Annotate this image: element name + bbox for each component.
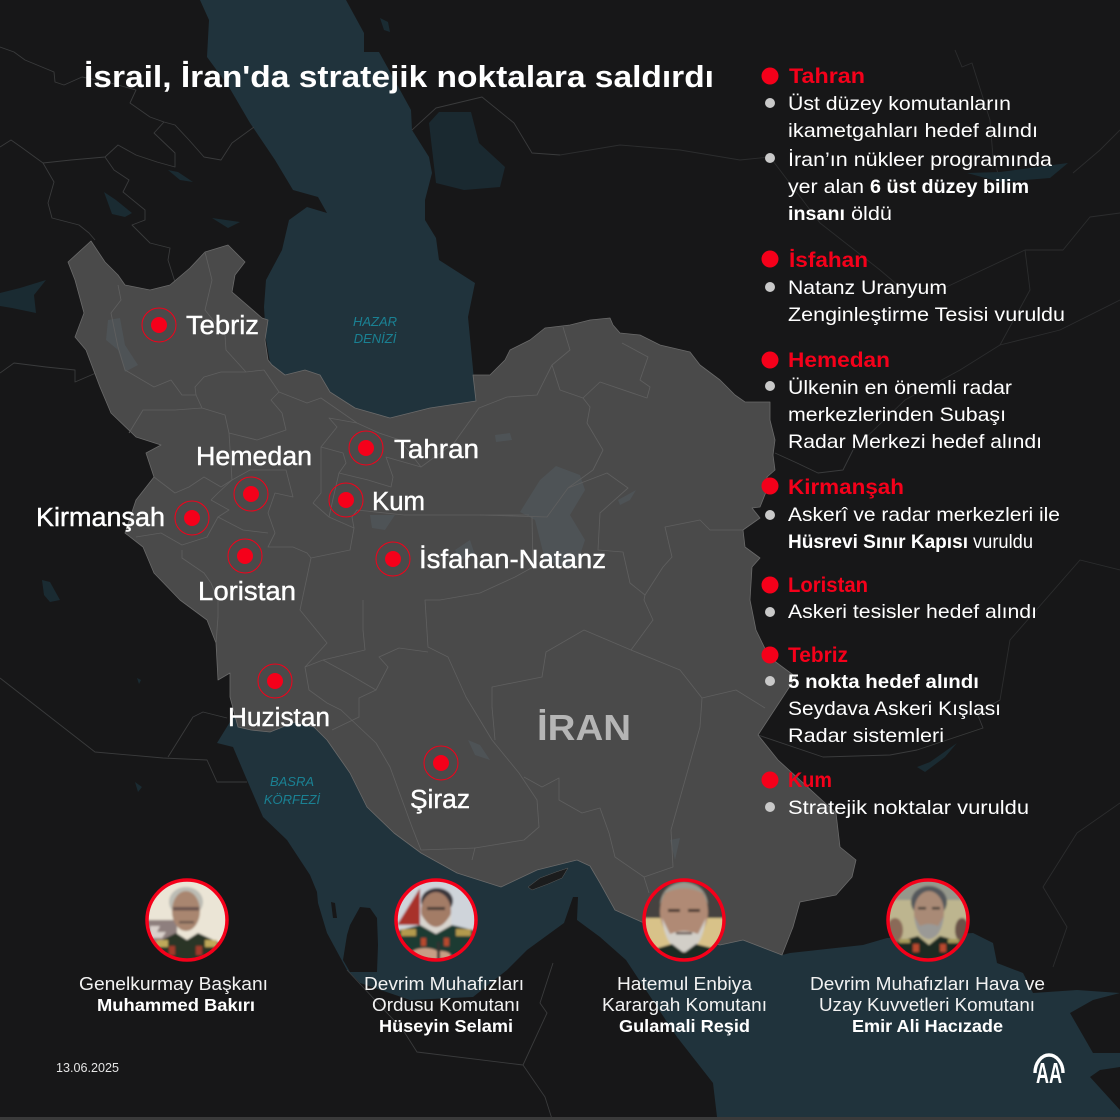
sea label: Hazar Denizi: HAZAR bbox=[353, 314, 397, 329]
panel: Tahran: insanı bbox=[788, 204, 845, 225]
marker: Şiraz: Şiraz bbox=[410, 786, 470, 814]
land: Bahrain island bbox=[331, 902, 337, 918]
caption: Muhammed Bakıri: Muhammed Bakırı bbox=[97, 995, 255, 1015]
marker: Tahran bbox=[349, 431, 479, 465]
panel: Kum: Stratejik noktalar vuruldu bbox=[788, 797, 1029, 819]
panel: Tahran: öldü bbox=[851, 203, 892, 225]
panel: Tebriz: Radar sistemleri bbox=[788, 725, 944, 747]
land: Qeshm island bbox=[528, 868, 568, 890]
portrait: Emir Ali Hacızade bbox=[886, 878, 970, 962]
panel: Tahran: yer alan bbox=[788, 176, 864, 198]
marker: Kum bbox=[329, 483, 425, 517]
panel: Kirmanşah: Askerî ve radar merkezleri ile bbox=[788, 504, 1060, 526]
sea label: Basra Körfezi: KÖRFEZİ bbox=[264, 792, 321, 807]
sea label: Basra Körfezi bbox=[264, 774, 321, 807]
marker: Şiraz bbox=[410, 746, 470, 814]
logo: Anadolu Agency bbox=[1035, 1055, 1063, 1090]
panel: Tahran: 6 üst düzey bilim bbox=[870, 177, 1029, 198]
caption: Muhammed Bakıri: Genelkurmay Başkanı bbox=[79, 974, 268, 994]
marker: Kirmanşah bbox=[36, 501, 209, 535]
caption: Emir Ali Hacızade: Devrim Muhafızları Hava ve bbox=[810, 974, 1045, 994]
caption: Gulamali Reşid: Hatemul Enbiya bbox=[617, 974, 753, 994]
caption: Emir Ali Hacızade bbox=[810, 974, 1045, 1036]
panel: Kum: Kum bbox=[788, 769, 832, 792]
marker: Hemedan: Hemedan bbox=[196, 443, 312, 471]
marker: Tebriz: Tebriz bbox=[186, 312, 259, 340]
panel: İsfahan: İsfahan bbox=[789, 249, 868, 272]
logo: Anadolu Agency: AA bbox=[1036, 1058, 1062, 1090]
portrait: Gulamali Reşid bbox=[642, 878, 726, 962]
water: Persian Gulf and Sea of Oman bbox=[217, 700, 1120, 1117]
title: İsrail, İran'da stratejik noktalara saldırdı bbox=[84, 60, 714, 94]
sea label: Hazar Denizi bbox=[353, 314, 397, 346]
panel: Tahran: Üst düzey komutanların bbox=[788, 93, 1011, 115]
panel: Tebriz: Tebriz bbox=[788, 644, 848, 667]
panel: Hemedan: Hemedan bbox=[788, 349, 890, 372]
marker: Tebriz bbox=[142, 308, 259, 342]
panel: Tebriz bbox=[762, 644, 1001, 747]
caption: Hüseyin Selami bbox=[364, 974, 524, 1036]
panel: Kum bbox=[762, 769, 1029, 819]
marker: Loristan bbox=[198, 539, 296, 606]
panel: Tahran bbox=[762, 65, 1052, 225]
marker: İsfahan-Natanz: İsfahan-Natanz bbox=[419, 545, 606, 574]
Iran province borders bbox=[111, 252, 765, 893]
sea label: Basra Körfezi: BASRA bbox=[270, 774, 314, 789]
panel: Loristan: Askeri tesisler hedef alındı bbox=[788, 601, 1037, 623]
panel: İsfahan bbox=[762, 249, 1065, 326]
panel: Kirmanşah: Kirmanşah bbox=[788, 476, 904, 499]
panel: Tebriz: Seydava Askeri Kışlası bbox=[788, 698, 1001, 720]
portrait: Muhammed Bakıri bbox=[145, 878, 229, 962]
caption: Muhammed Bakıri bbox=[79, 974, 268, 1015]
caption: Hüseyin Selami: Ordusu Komutanı bbox=[372, 995, 520, 1015]
land: Qatar peninsula bbox=[343, 907, 378, 972]
panel: Hemedan: merkezlerinden Subaşı bbox=[788, 404, 1006, 426]
marker: Hemedan bbox=[196, 443, 312, 511]
caption: Hüseyin Selami: Hüseyin Selami bbox=[379, 1016, 513, 1036]
marker: Huzistan: Huzistan bbox=[228, 704, 330, 732]
caption: Emir Ali Hacızade: Emir Ali Hacızade bbox=[852, 1016, 1003, 1036]
marker: Kirmanşah: Kirmanşah bbox=[36, 504, 165, 532]
Iran salt lakes and deserts bbox=[106, 318, 680, 860]
date: 13.06.2025 bbox=[56, 1061, 119, 1075]
caption: Gulamali Reşid: Gulamali Reşid bbox=[619, 1016, 750, 1036]
panel: İsfahan: Natanz Uranyum bbox=[788, 277, 947, 299]
water: Caspian Sea bbox=[200, 0, 476, 430]
caption: Emir Ali Hacızade: Uzay Kuvvetleri Komutanı bbox=[819, 995, 1035, 1015]
caption: Gulamali Reşid bbox=[602, 974, 767, 1036]
water: Kara-Bogaz lagoon bbox=[429, 112, 505, 190]
panel: Tahran: Tahran bbox=[789, 65, 865, 88]
panel: Loristan bbox=[762, 574, 1037, 623]
panel: Tebriz: 5 nokta hedef alındı bbox=[788, 672, 979, 693]
panel: Hemedan: Ülkenin en önemli radar bbox=[788, 377, 1013, 399]
panel: Kirmanşah: Hüsrevi Sınır Kapısı bbox=[788, 532, 968, 553]
panel: Kirmanşah: vuruldu bbox=[973, 531, 1033, 553]
bottom edge bbox=[0, 1117, 1120, 1120]
panel: Hemedan bbox=[762, 349, 1042, 453]
map: Iran bbox=[68, 241, 856, 955]
panel: Tahran: İran’ın nükleer programında bbox=[788, 148, 1052, 171]
marker: Loristan: Loristan bbox=[198, 578, 296, 606]
panel: Loristan: Loristan bbox=[788, 574, 868, 597]
country label: Iran: İRAN bbox=[537, 707, 631, 748]
marker: İsfahan-Natanz bbox=[376, 542, 606, 576]
marker: Tahran: Tahran bbox=[394, 436, 479, 464]
sea label: Hazar Denizi: DENİZİ bbox=[354, 331, 397, 346]
panel: İsfahan: Zenginleştirme Tesisi vuruldu bbox=[788, 304, 1065, 326]
panel: Kirmanşah bbox=[762, 476, 1060, 553]
panel: Tahran: ikametgahları hedef alındı bbox=[788, 120, 1038, 142]
caption: Hüseyin Selami: Devrim Muhafızları bbox=[364, 974, 524, 994]
marker: Kum: Kum bbox=[372, 488, 425, 516]
marker: Huzistan bbox=[228, 664, 330, 732]
lakes outside Iran bbox=[0, 18, 1068, 792]
panel: Hemedan: Radar Merkezi hedef alındı bbox=[788, 431, 1042, 453]
portrait: Hüseyin Selami bbox=[395, 878, 479, 962]
caption: Gulamali Reşid: Karargah Komutanı bbox=[602, 995, 767, 1015]
